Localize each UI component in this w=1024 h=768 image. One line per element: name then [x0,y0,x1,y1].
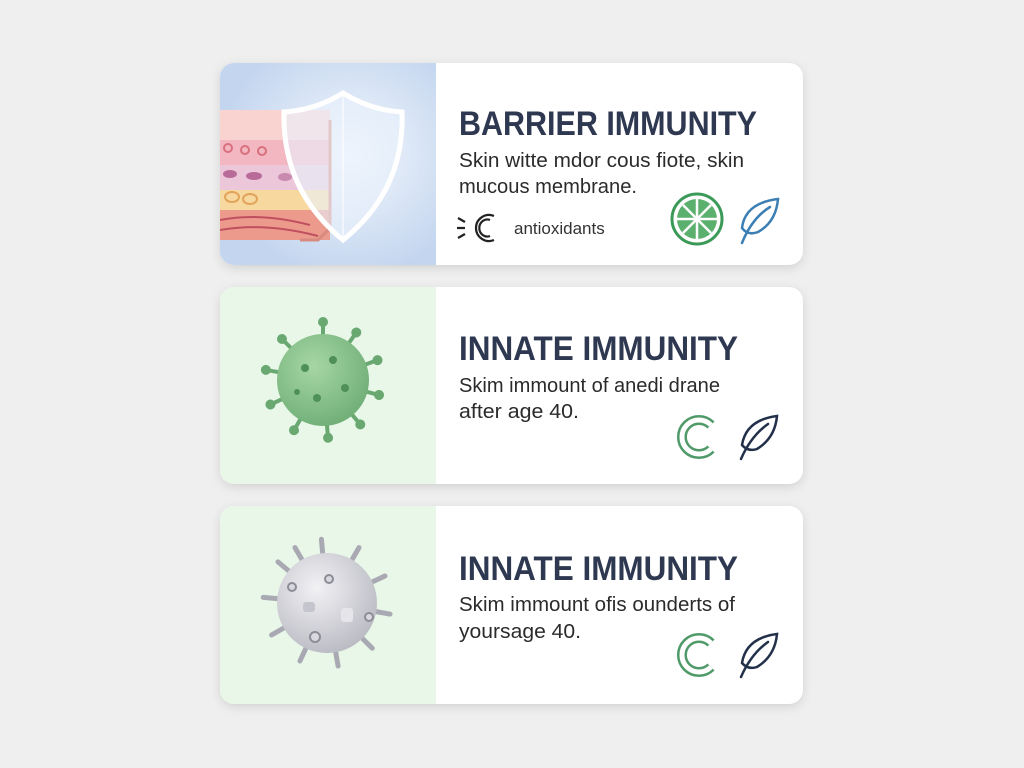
text block [459,594,735,643]
panel: barrier immunity [220,63,803,265]
text block: Skim immount of anedi drane [459,375,720,397]
heading: INNATE IMMUNITY [459,550,738,588]
icon: leaf [741,634,777,677]
icon: leaf [741,416,777,459]
icon: vitamin C burst [457,215,494,241]
icon: citrus slice [672,194,722,244]
text block: mucous membrane. [459,176,637,198]
text block: after age 40. [459,401,579,423]
text block: yoursage 40. [459,621,581,643]
icon: green virus [260,317,385,443]
text block [459,375,720,423]
text block: Skim immount ofis ounderts of [459,594,735,616]
icon: vitamin C [682,638,711,672]
icon: vitamin C [682,420,711,454]
icon: blue leaf [742,199,778,243]
panel: innate immunity (grey virus) [220,506,803,704]
heading: barrier immunity: BARRIER IMMUNITY [459,105,757,143]
panel: innate immunity (green virus) [220,287,803,484]
icon: shield [284,93,402,240]
heading: INNATE IMMUNITY [459,330,738,368]
text block: Skin witte mdor cous fiote, skin [459,150,744,172]
icon: grey virus [263,539,390,666]
text block [459,150,744,198]
illustration: skin layers with shield [220,63,436,265]
label: antioxidants: antioxidants [514,219,605,238]
